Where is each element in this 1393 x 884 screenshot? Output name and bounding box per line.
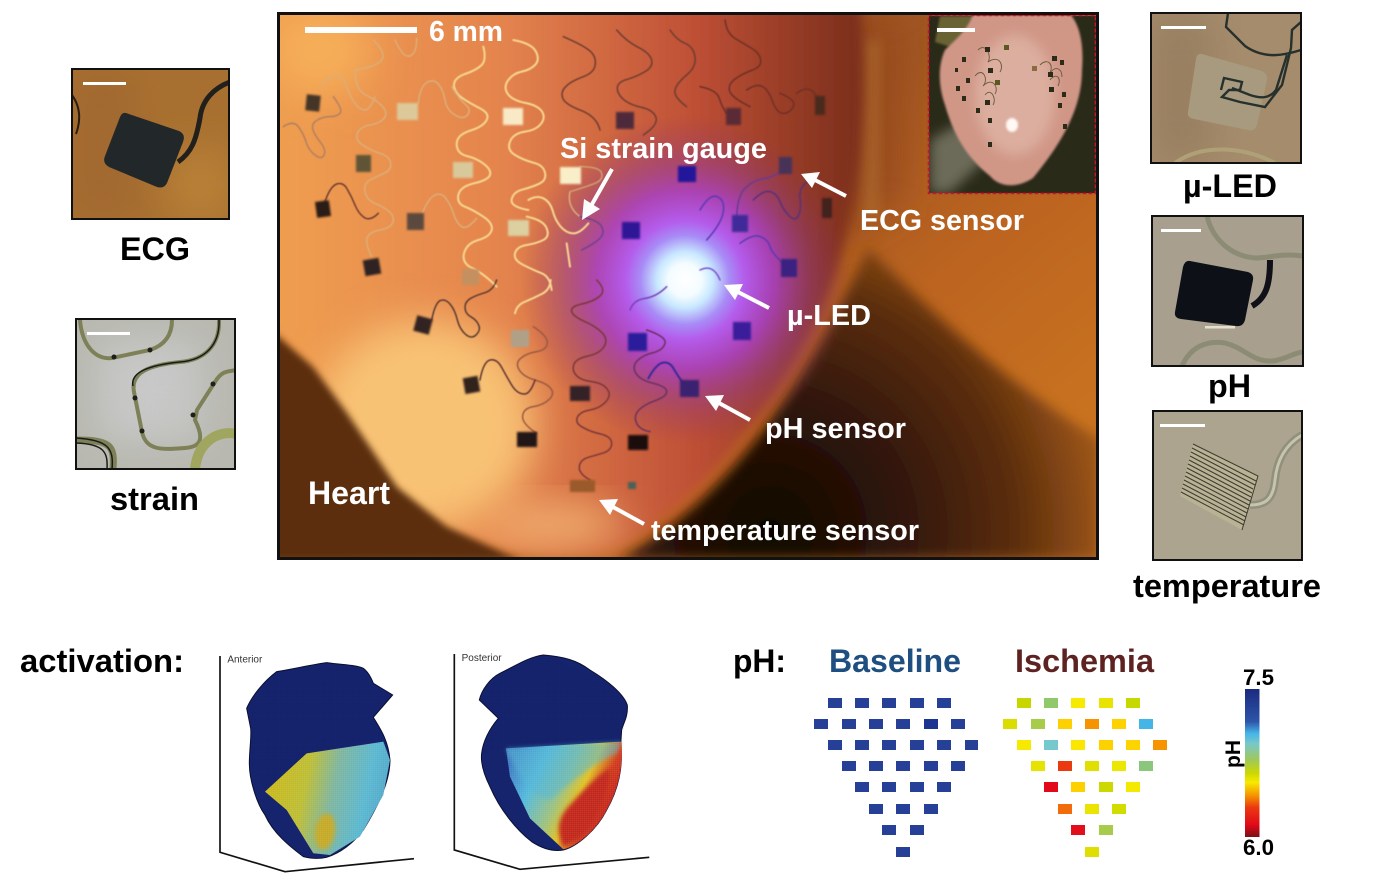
callout: pH sensor	[705, 395, 906, 445]
label: Heart: Heart	[308, 475, 390, 511]
panel: main heart photograph	[260, 0, 1100, 560]
callout: µ-LED: µ-LED	[787, 300, 871, 332]
callout: Si strain gauge: Si strain gauge	[560, 133, 767, 165]
scale bar: 6 mm	[305, 20, 502, 42]
serpentine interconnects	[283, 20, 817, 480]
photo: strain gauge	[76, 319, 236, 469]
inset border	[928, 16, 1096, 194]
label: strain: strain	[110, 481, 199, 517]
legend: pH colour bar: 7.5	[1243, 665, 1274, 690]
callout: Si strain gauge	[560, 133, 767, 220]
callout: ECG sensor: ECG sensor	[860, 205, 1024, 237]
photo background tissue	[260, 0, 1100, 560]
main photo border	[278, 14, 1098, 558]
callout: µ-LED	[724, 284, 871, 332]
heading: Ischemia: Ischemia	[1015, 643, 1154, 679]
callout: ECG sensor	[801, 172, 1024, 230]
chart: posterior heart activation: Posterior	[462, 653, 502, 664]
label: µ-LED: µ-LED	[1183, 168, 1277, 204]
chart: ischemia pH grid	[1003, 698, 1167, 857]
photo: temperature sensor	[1153, 411, 1302, 560]
legend: pH colour bar	[1222, 665, 1274, 860]
photo: pH sensor	[1152, 216, 1303, 366]
photo: µ-LED	[1151, 13, 1301, 163]
chart: posterior heart activation	[454, 653, 649, 869]
label: ECG: ECG	[120, 231, 190, 267]
chart: anterior heart activation	[220, 654, 414, 872]
photo: ECG sensor	[72, 69, 230, 220]
callout: pH sensor: pH sensor	[765, 413, 906, 445]
legend: pH colour bar: pH	[1222, 740, 1245, 768]
heading: activation: activation:	[20, 642, 184, 679]
heading: Baseline: Baseline	[829, 643, 961, 679]
sensor islands	[305, 94, 832, 492]
callout: temperature sensor: temperature sensor	[651, 515, 919, 547]
heading: pH: pH:	[733, 643, 786, 679]
label: temperature: temperature	[1133, 568, 1321, 604]
chart: anterior heart activation: Anterior	[227, 654, 263, 665]
inset photo	[929, 14, 1096, 193]
label: pH: pH	[1208, 368, 1251, 404]
scale bar: 6 mm: 6 mm	[429, 15, 503, 47]
callout: temperature sensor	[599, 499, 919, 547]
chart: baseline pH grid	[814, 698, 978, 857]
legend: pH colour bar: 6.0	[1243, 835, 1274, 860]
